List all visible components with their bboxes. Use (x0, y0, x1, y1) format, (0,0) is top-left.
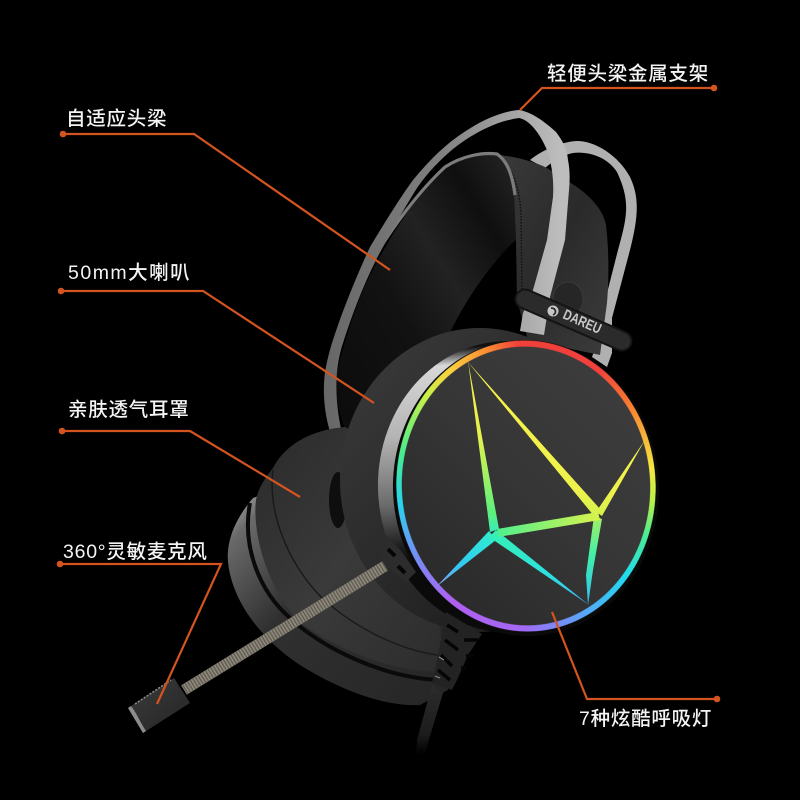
shell groove (248, 503, 440, 680)
ear pad seam (272, 470, 445, 656)
star light pattern (436, 361, 645, 605)
label: breathing light: 7种炫酷呼吸灯 (579, 708, 712, 730)
cable (416, 685, 443, 756)
microphone capsule (128, 678, 190, 733)
callout: microphone (58, 562, 221, 704)
pad rim (374, 154, 515, 258)
leather stitching (503, 160, 522, 295)
rear metal band (530, 141, 637, 367)
rgb light ring (389, 333, 663, 639)
callout: lightweight metal bracket (520, 86, 716, 110)
label: lightweight metal bracket: 轻便头梁金属支架 (547, 63, 709, 85)
ear pad cushion (255, 427, 445, 672)
mic mount (380, 536, 416, 582)
callout: breathing light (552, 612, 719, 701)
callout: adaptive headband (61, 132, 390, 270)
slider bar with logo: DAREU (560, 307, 603, 338)
disc face (393, 338, 659, 634)
slider bar with logo (525, 299, 622, 341)
label: microphone: 360°灵敏麦克风 (63, 541, 208, 563)
callout: 50mm speaker (59, 289, 374, 403)
speaker housing ring (340, 328, 620, 632)
adaptive headband pad (336, 155, 516, 440)
label: 50mm speaker: 50mm大喇叭 (68, 262, 191, 284)
front metal band (324, 110, 570, 445)
silver trim (371, 334, 647, 640)
disc black edge (385, 333, 667, 643)
cable strain relief (432, 612, 482, 690)
ear hole (329, 472, 347, 528)
gooseneck boom (184, 566, 385, 690)
ear cup outer shell (228, 480, 448, 705)
slider pivot (553, 282, 583, 316)
label: ear pads: 亲肤透气耳罩 (68, 399, 190, 421)
label: adaptive headband: 自适应头梁 (66, 108, 167, 130)
back headband leather (497, 155, 608, 355)
callout: ear pads (60, 429, 300, 497)
